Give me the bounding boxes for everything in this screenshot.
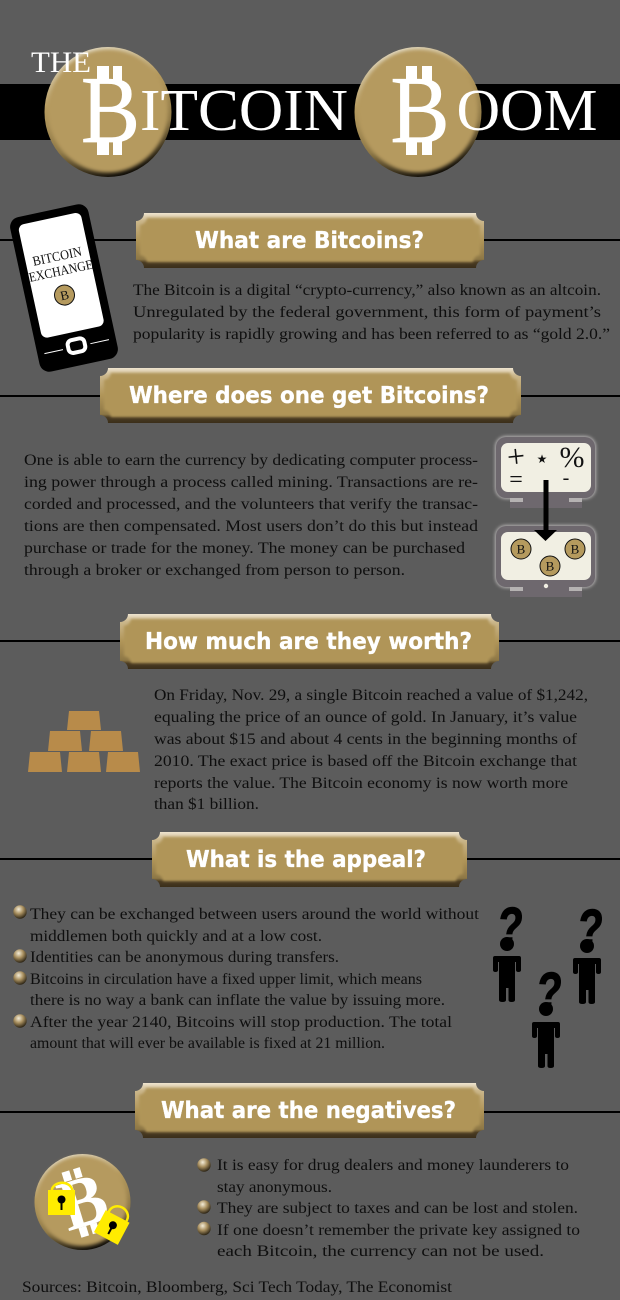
text: where to get bitcoins: One is able to earn the currency by dedicating computer process- [24, 451, 478, 469]
icon: computer with symbols [495, 436, 596, 508]
list: appeal: Identities can be anonymous during transfers. [30, 948, 339, 966]
icon: gold bars [28, 711, 140, 772]
icon: person with question mark right: ? [576, 899, 605, 959]
heading: what are bitcoins: What are Bitcoins? [195, 228, 424, 254]
icon: computer with coins: B [546, 558, 555, 574]
text: where to get bitcoins: purchase or trade for the money. The money can be purchased [24, 539, 465, 557]
heading word: bitcoin [81, 57, 348, 163]
icon: computer with symbols: = [509, 467, 523, 493]
text: worth: 2010. The exact price is based off the Bitcoin exchange that [154, 752, 578, 770]
list: negatives: each Bitcoin, the currency can not be used. [217, 1242, 544, 1260]
list: negatives [197, 1156, 580, 1260]
heading: what are bitcoins [136, 213, 484, 268]
text: what are bitcoins [133, 281, 610, 343]
icon: bitcoin coin right [354, 47, 482, 177]
arrow [534, 480, 557, 541]
icon: phone: BITCOIN [31, 244, 83, 269]
list: appeal [13, 905, 480, 1052]
panel: how much are they worth [28, 614, 588, 813]
panel: what are the negatives [34, 1083, 580, 1260]
icon: bitcoin coin left [44, 47, 172, 177]
heading: what are the negatives: What are the negatives? [161, 1098, 456, 1124]
heading: where does one get bitcoins [100, 368, 521, 423]
panel: what is the appeal [13, 832, 605, 1068]
icon: padlock right [94, 1201, 134, 1245]
icon: person with question mark left: ? [496, 897, 525, 957]
icon: computer with coins: B [517, 542, 526, 556]
list: appeal: amount that will ever be available is fixed at 21 million. [30, 1034, 385, 1052]
text: worth: equaling the price of an ounce of gold. In January, it’s value [154, 708, 577, 726]
title [0, 46, 620, 177]
icon: person with question mark middle [532, 962, 564, 1068]
list: negatives: If one doesn’t remember the private key assigned to [217, 1221, 580, 1239]
icon: computer with symbols: ★ [537, 452, 547, 466]
text: worth: was about $15 and about 4 cents in the beginning months of [154, 730, 578, 748]
text: where to get bitcoins: through a broker or exchanged from person to person. [24, 561, 405, 579]
list: appeal: After the year 2140, Bitcoins will stop production. The total [30, 1013, 453, 1031]
heading word: boom [390, 57, 598, 163]
icon: person with question mark right [573, 899, 605, 1004]
sources: Sources: Bitcoin, Bloomberg, Sci Tech Today, The Economist [22, 1278, 453, 1296]
icon: computer with symbols: + [505, 437, 527, 475]
list: appeal: middlemen both quickly and at a low cost. [30, 927, 322, 945]
heading: how much are they worth [120, 614, 499, 669]
icon: phone: B [59, 287, 71, 303]
icon: locked bitcoin [34, 1154, 134, 1250]
text: what are bitcoins: The Bitcoin is a digital “crypto-currency,” also known as an altcoin. [133, 281, 601, 299]
heading: where does one get bitcoins: Where does one get Bitcoins? [129, 383, 489, 409]
icon: computer with coins: B [571, 542, 580, 556]
text: what are bitcoins: Unregulated by the federal government, this form of payment’s [133, 303, 601, 321]
text: where to get bitcoins: ing power through a process called mining. Transactions are re- [24, 473, 478, 491]
text: worth: reports the value. The Bitcoin economy is now worth more [154, 774, 568, 792]
panel: where does one get bitcoins [24, 368, 596, 597]
icon: computer with symbols: % [560, 441, 584, 474]
list: negatives: stay anonymous. [217, 1178, 332, 1196]
icon: computer with symbols: - [563, 467, 569, 489]
heading word: bitcoin: B [81, 57, 140, 163]
panel: what are bitcoins [8, 202, 610, 374]
icon: phone: EXCHANGE [27, 257, 94, 285]
icon: person with question mark middle: ? [535, 962, 564, 1022]
text: where to get bitcoins: corded and processed, and the volunteers that verify the transac- [24, 495, 478, 513]
text: worth: than $1 billion. [154, 795, 259, 813]
heading: how much are they worth: How much are they worth? [145, 629, 472, 655]
text: worth: On Friday, Nov. 29, a single Bitcoin reached a value of $1,242, [154, 686, 588, 704]
icon: phone [8, 202, 120, 374]
text: where to get bitcoins [24, 451, 478, 579]
text: worth [154, 686, 588, 813]
icon: locked bitcoin: B [49, 1157, 117, 1247]
icon: computer with coins [495, 525, 596, 597]
heading word: boom: OOM [456, 77, 598, 143]
list: negatives: They are subject to taxes and can be lost and stolen. [217, 1199, 578, 1217]
list: appeal: Bitcoins in circulation have a fixed upper limit, which means [30, 970, 422, 988]
heading: what is the appeal: What is the appeal? [186, 847, 426, 873]
text: what are bitcoins: popularity is rapidly growing and has been referred to as “gold 2.0.” [133, 325, 610, 343]
heading: what are the negatives [135, 1083, 484, 1138]
list: negatives: It is easy for drug dealers and money launderers to [217, 1156, 569, 1174]
list: appeal: They can be exchanged between users around the world without [30, 905, 480, 923]
list: appeal: there is no way a bank can inflate the value by issuing more. [30, 991, 445, 1009]
heading word: the: THE [31, 46, 91, 79]
heading: what is the appeal [152, 832, 467, 887]
text: where to get bitcoins: tions are then compensated. Most users don’t do this but instead [24, 517, 478, 535]
heading word: boom: B [390, 57, 450, 163]
icon: person with question mark left [493, 897, 525, 1002]
icon: padlock left [48, 1183, 75, 1215]
heading word: bitcoin: ITCOIN [140, 77, 348, 143]
